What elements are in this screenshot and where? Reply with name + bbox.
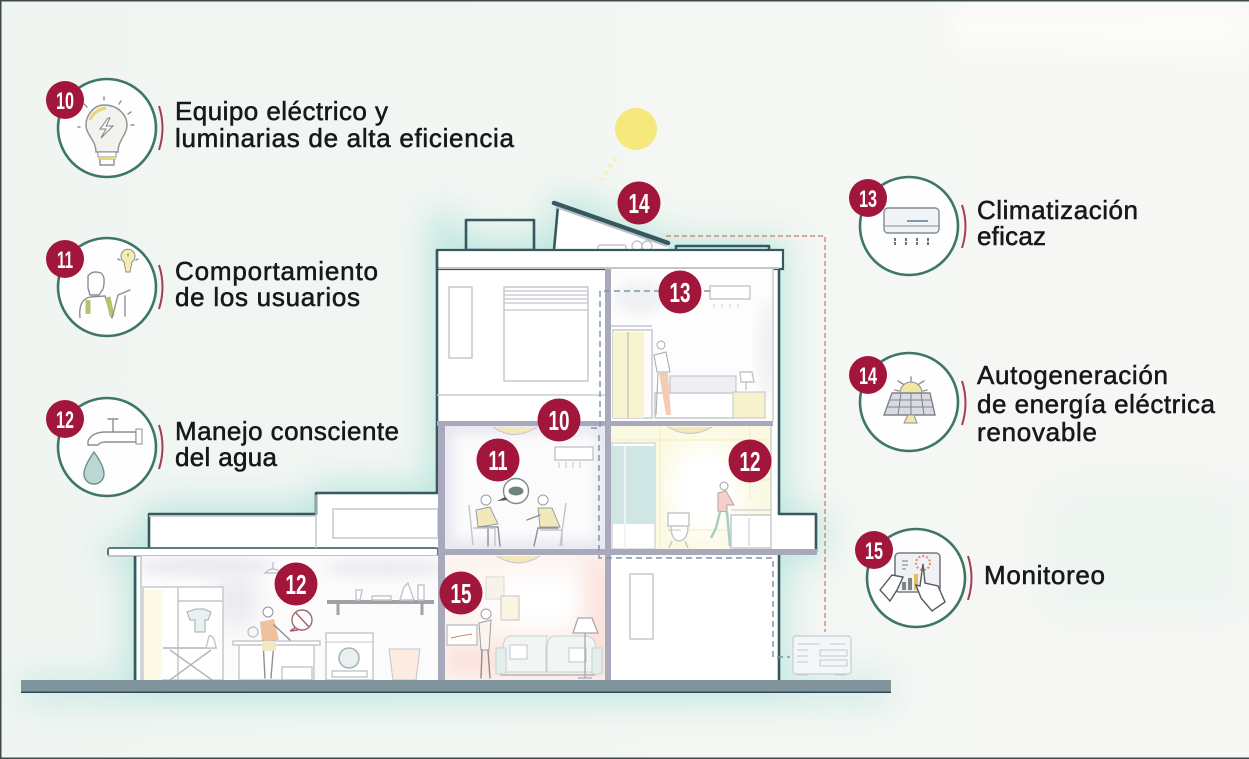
icon: light bulb (78, 97, 134, 165)
label: de energía eléctrica (977, 389, 1216, 419)
item 13: climate control (849, 177, 1138, 275)
label (175, 256, 378, 312)
item 11: user behaviour (46, 238, 378, 336)
badge 10 (46, 81, 84, 119)
marker 12 right (728, 440, 772, 482)
marker 14 (618, 182, 660, 224)
label: del agua (175, 442, 278, 472)
marker 14: 14 (628, 188, 650, 219)
marker 11: 11 (488, 445, 508, 476)
label: Monitoreo (984, 560, 1105, 590)
person washing (260, 607, 290, 678)
badge 10: 10 (56, 88, 74, 115)
badge 12 (46, 400, 84, 438)
marker 10 (538, 398, 580, 442)
marker 12 left (274, 562, 318, 606)
label (175, 96, 515, 153)
room: kitchen and laundry (135, 556, 445, 680)
room: living 11 (445, 425, 605, 549)
badge 15 (855, 531, 893, 569)
house markers (274, 182, 772, 614)
marker 15: 15 (450, 578, 472, 609)
house outline and walls (108, 202, 816, 680)
woman at sink (711, 482, 734, 546)
icon: person with bulb (80, 249, 138, 318)
label (175, 416, 399, 472)
label: Climatización (977, 195, 1138, 225)
person with phone (654, 341, 671, 415)
marker 10: 10 (548, 405, 570, 436)
badge 14 (849, 356, 887, 394)
badge 13: 13 (859, 186, 877, 213)
badge 12: 12 (56, 407, 74, 434)
blue dashed circuit (590, 291, 790, 657)
marker 13: 13 (670, 277, 690, 308)
upper left facade windows (437, 287, 605, 395)
label: Manejo consciente (175, 416, 399, 446)
air conditioner (710, 286, 750, 308)
label: Comportamiento (175, 256, 378, 286)
label (977, 195, 1138, 251)
room: bedroom (611, 269, 778, 419)
icon: solar panel (884, 377, 935, 423)
woman at panel (479, 609, 491, 678)
marker 12 left: 12 (286, 569, 306, 600)
marker 13 (658, 270, 702, 314)
icon: sun (601, 108, 657, 180)
structural floors and walls (437, 269, 817, 680)
bracket (159, 106, 162, 150)
ground slab (21, 680, 891, 693)
item 12: water (46, 398, 399, 496)
label: Autogeneración (977, 360, 1168, 390)
badge 11 (46, 240, 84, 278)
bracket (962, 381, 966, 425)
item 14: solar generation (849, 353, 1216, 451)
icon: tablet and hands (880, 553, 945, 611)
no water icon (290, 610, 312, 631)
bracket (159, 425, 162, 469)
badge 14: 14 (859, 363, 877, 390)
marker 11 (476, 438, 520, 482)
red dashed circuit (666, 236, 825, 632)
marker 12 right: 12 (740, 446, 760, 477)
bracket (159, 265, 162, 309)
badge 11: 11 (57, 247, 73, 274)
bracket (962, 205, 966, 248)
marker 15 (440, 572, 482, 614)
sofa (496, 636, 602, 675)
room: living 15 (445, 555, 605, 680)
label: de los usuarios (175, 282, 360, 312)
icon: air conditioner (884, 208, 939, 246)
people talking (469, 478, 566, 546)
label: Equipo eléctrico y (175, 96, 388, 126)
badge 13 (849, 179, 887, 217)
icon: faucet and drop (84, 419, 142, 484)
room: bathroom (611, 425, 771, 549)
ceiling lamp bathroom (668, 427, 712, 434)
badge 15: 15 (865, 538, 883, 565)
item 15: monitoring (855, 529, 1105, 627)
bracket (968, 556, 972, 600)
label: renovable (977, 417, 1097, 447)
house illustration (21, 108, 891, 693)
label (977, 360, 1216, 447)
label: luminarias de alta eficiencia (175, 123, 515, 153)
label: eficaz (977, 221, 1046, 251)
item 10: lighting (46, 79, 515, 177)
inverter unit (793, 636, 851, 675)
